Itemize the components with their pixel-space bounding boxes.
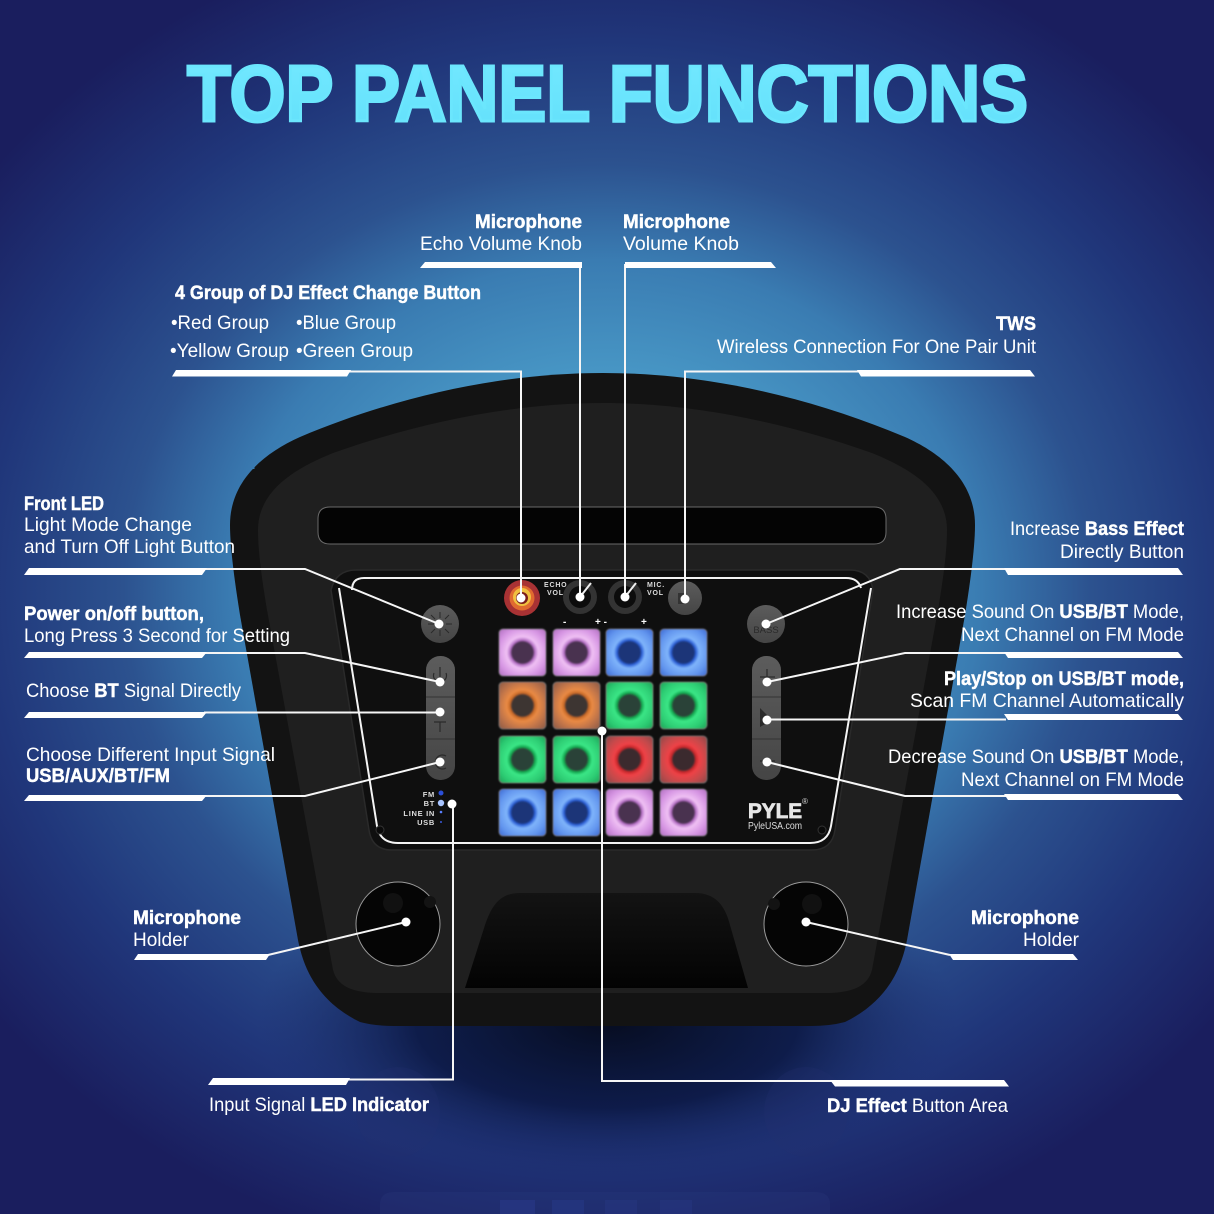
label: front LED xyxy=(24,493,235,558)
TWS button xyxy=(668,581,702,615)
label: TWS: Wireless Connection For One Pair Unit xyxy=(717,336,1037,358)
input indicator labels xyxy=(403,790,444,827)
title: TOP PANEL FUNCTIONS xyxy=(187,49,1028,138)
label: bass: Increase Bass Effect xyxy=(1010,518,1184,540)
PYLE logo: PyleUSA.com xyxy=(748,820,802,832)
plus mark: + xyxy=(641,617,647,628)
label: play stop: Scan FM Channel Automatically xyxy=(910,690,1184,712)
mic knob xyxy=(608,580,642,614)
label: bass xyxy=(1010,518,1184,563)
input indicator labels: FM xyxy=(423,790,435,799)
control panel xyxy=(331,570,873,850)
label: microphone volume knob: Volume Knob xyxy=(623,233,739,255)
label: play stop: Play/Stop on USB/BT mode, xyxy=(944,668,1184,690)
label: microphone volume knob: Microphone xyxy=(623,211,730,233)
front LED button xyxy=(421,605,459,643)
DJ effect change button xyxy=(504,580,540,616)
label: microphone holder right xyxy=(971,907,1079,951)
label: microphone holder right: Microphone xyxy=(971,907,1079,929)
label: front LED: and Turn Off Light Button xyxy=(24,536,235,558)
DJ effect buttons xyxy=(499,629,707,836)
mic vol label: VOL xyxy=(647,590,664,597)
PYLE logo: ® xyxy=(802,797,808,806)
left button strip xyxy=(426,656,455,780)
input indicator labels: BT xyxy=(424,799,435,808)
label: input signal xyxy=(26,744,275,787)
speaker body xyxy=(230,373,975,1026)
label: DJ effect change button: •Red Group xyxy=(171,312,269,334)
speaker floor reflection xyxy=(257,860,957,1214)
label: power: Power on/off button, xyxy=(24,603,204,625)
label: decrease sound xyxy=(888,746,1184,791)
bass button xyxy=(747,605,785,643)
label: power xyxy=(24,603,290,647)
leader label bars xyxy=(24,262,1183,1086)
PYLE logo: PYLE xyxy=(748,800,802,823)
label: input signal: USB/AUX/BT/FM xyxy=(26,765,170,787)
label: decrease sound: Decrease Sound On USB/BT Mode, xyxy=(888,746,1184,768)
mic label: MIC. xyxy=(647,582,665,589)
echo label: ECHO xyxy=(544,582,567,589)
label: input signal: Choose Different Input Signal xyxy=(26,744,275,766)
front notch xyxy=(465,893,748,988)
label: front LED: Light Mode Change xyxy=(24,514,192,536)
leader lines xyxy=(204,264,1006,1081)
label: increase sound: Increase Sound On USB/BT Mode, xyxy=(896,601,1184,623)
label: decrease sound: Next Channel on FM Mode xyxy=(961,769,1184,791)
PYLE logo xyxy=(748,797,808,832)
label: DJ effect change button: 4 Group of DJ Effect Change Button xyxy=(175,282,481,304)
label: power: Long Press 3 Second for Setting xyxy=(24,625,290,647)
label: microphone holder left: Holder xyxy=(133,929,189,951)
microphone holder right xyxy=(764,882,848,966)
side controls xyxy=(421,605,785,780)
label: microphone holder left: Microphone xyxy=(133,907,241,929)
echo vol label: VOL xyxy=(547,590,564,597)
label: increase sound: Next Channel on FM Mode xyxy=(961,624,1184,646)
label: microphone echo volume knob: Echo Volume Knob xyxy=(420,233,582,255)
label: DJ effect area: DJ Effect Button Area xyxy=(827,1095,1008,1117)
label: microphone holder left xyxy=(133,907,241,951)
label: play stop xyxy=(910,668,1184,712)
label: TWS xyxy=(717,313,1037,358)
label: DJ effect change button: •Blue Group xyxy=(296,312,396,334)
label: DJ effect change button xyxy=(170,282,481,362)
label: TWS: TWS xyxy=(996,313,1036,335)
echo knob xyxy=(563,580,597,614)
plus minus marks: + - xyxy=(595,617,607,628)
label: DJ effect change button: •Green Group xyxy=(296,340,413,362)
right button strip xyxy=(752,656,781,780)
label: microphone echo volume knob: Microphone xyxy=(475,211,582,233)
input indicator labels: LINE IN xyxy=(403,809,435,818)
label: bass: Directly Button xyxy=(1060,541,1184,563)
label: microphone echo volume knob xyxy=(420,211,582,255)
leader dots xyxy=(402,592,810,926)
bass button: BASS xyxy=(753,625,779,636)
label: increase sound xyxy=(896,601,1184,646)
label: front LED: Front LED xyxy=(24,493,104,515)
label: microphone volume knob xyxy=(623,211,739,255)
label: DJ effect change button: •Yellow Group xyxy=(170,340,289,362)
label: BT: Choose BT Signal Directly xyxy=(26,680,241,702)
speaker handle slot xyxy=(318,507,886,544)
top controls xyxy=(504,580,702,628)
microphone holder left xyxy=(356,882,440,966)
label: microphone holder right: Holder xyxy=(1023,929,1079,951)
input indicator labels: USB xyxy=(417,818,435,827)
knob scale marks: - xyxy=(563,617,566,628)
label: LED indicator: Input Signal LED Indicator xyxy=(209,1094,429,1116)
